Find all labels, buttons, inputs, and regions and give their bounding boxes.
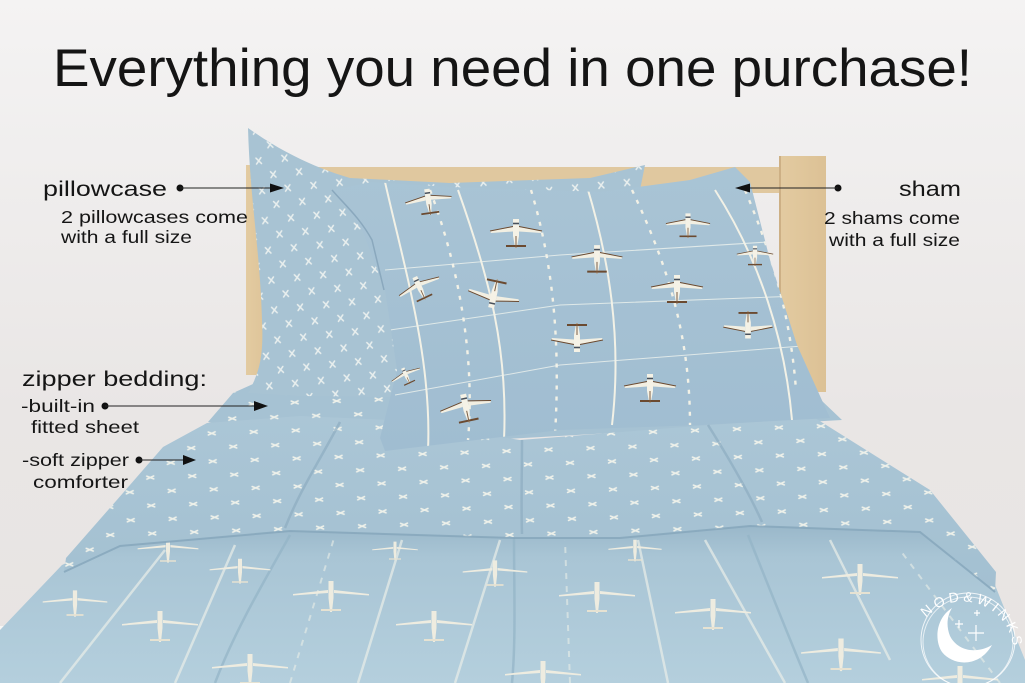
callout: zipper bedding: zipper bedding: — [22, 367, 207, 391]
title: Everything you need in one purchase! — [53, 39, 972, 98]
sham flap fold — [332, 190, 384, 290]
callout: zipper bedding: comforter — [33, 472, 128, 492]
logo: Nod & Winks: NOD&WINKS — [920, 592, 1022, 645]
callout: pillowcase: 2 pillowcases come — [61, 207, 248, 227]
callout: sham — [735, 178, 961, 250]
callout: sham: sham — [899, 178, 961, 201]
comforter quilting seams — [215, 535, 808, 683]
stars — [955, 610, 984, 641]
callout: pillowcase: pillowcase — [43, 178, 167, 201]
sham runway lines — [385, 180, 792, 450]
callout: pillowcase: with a full size — [60, 227, 192, 247]
back pillow: pillowcase — [248, 128, 645, 397]
logo: Nod & Winks — [920, 592, 1022, 683]
baseboard — [0, 626, 20, 638]
callout: zipper bedding — [21, 367, 268, 492]
arrow: fitted sheet — [105, 401, 268, 411]
fold lower edge — [64, 526, 995, 592]
sheet pattern — [208, 380, 400, 440]
callout: sham: 2 shams come — [824, 208, 960, 228]
headboard — [246, 156, 826, 392]
callout: zipper bedding: -built-in — [21, 396, 95, 416]
callout: zipper bedding: fitted sheet — [31, 417, 139, 437]
comforter top fold — [64, 416, 996, 592]
comforter planes — [43, 538, 998, 683]
arrow: pillowcase — [180, 184, 284, 192]
callout: pillowcase — [43, 178, 284, 247]
crescent — [937, 608, 992, 662]
comforter lower panel — [0, 526, 1025, 683]
sham planes — [389, 186, 773, 428]
fold seams — [285, 422, 762, 534]
comforter lines — [60, 540, 890, 683]
callout: zipper bedding: -soft zipper — [22, 450, 129, 470]
bed sheet — [208, 380, 842, 445]
arrow: comforter — [139, 455, 196, 465]
callout: sham: with a full size — [828, 230, 960, 250]
front pillow: sham — [332, 167, 830, 451]
arrow: sham — [735, 184, 838, 192]
